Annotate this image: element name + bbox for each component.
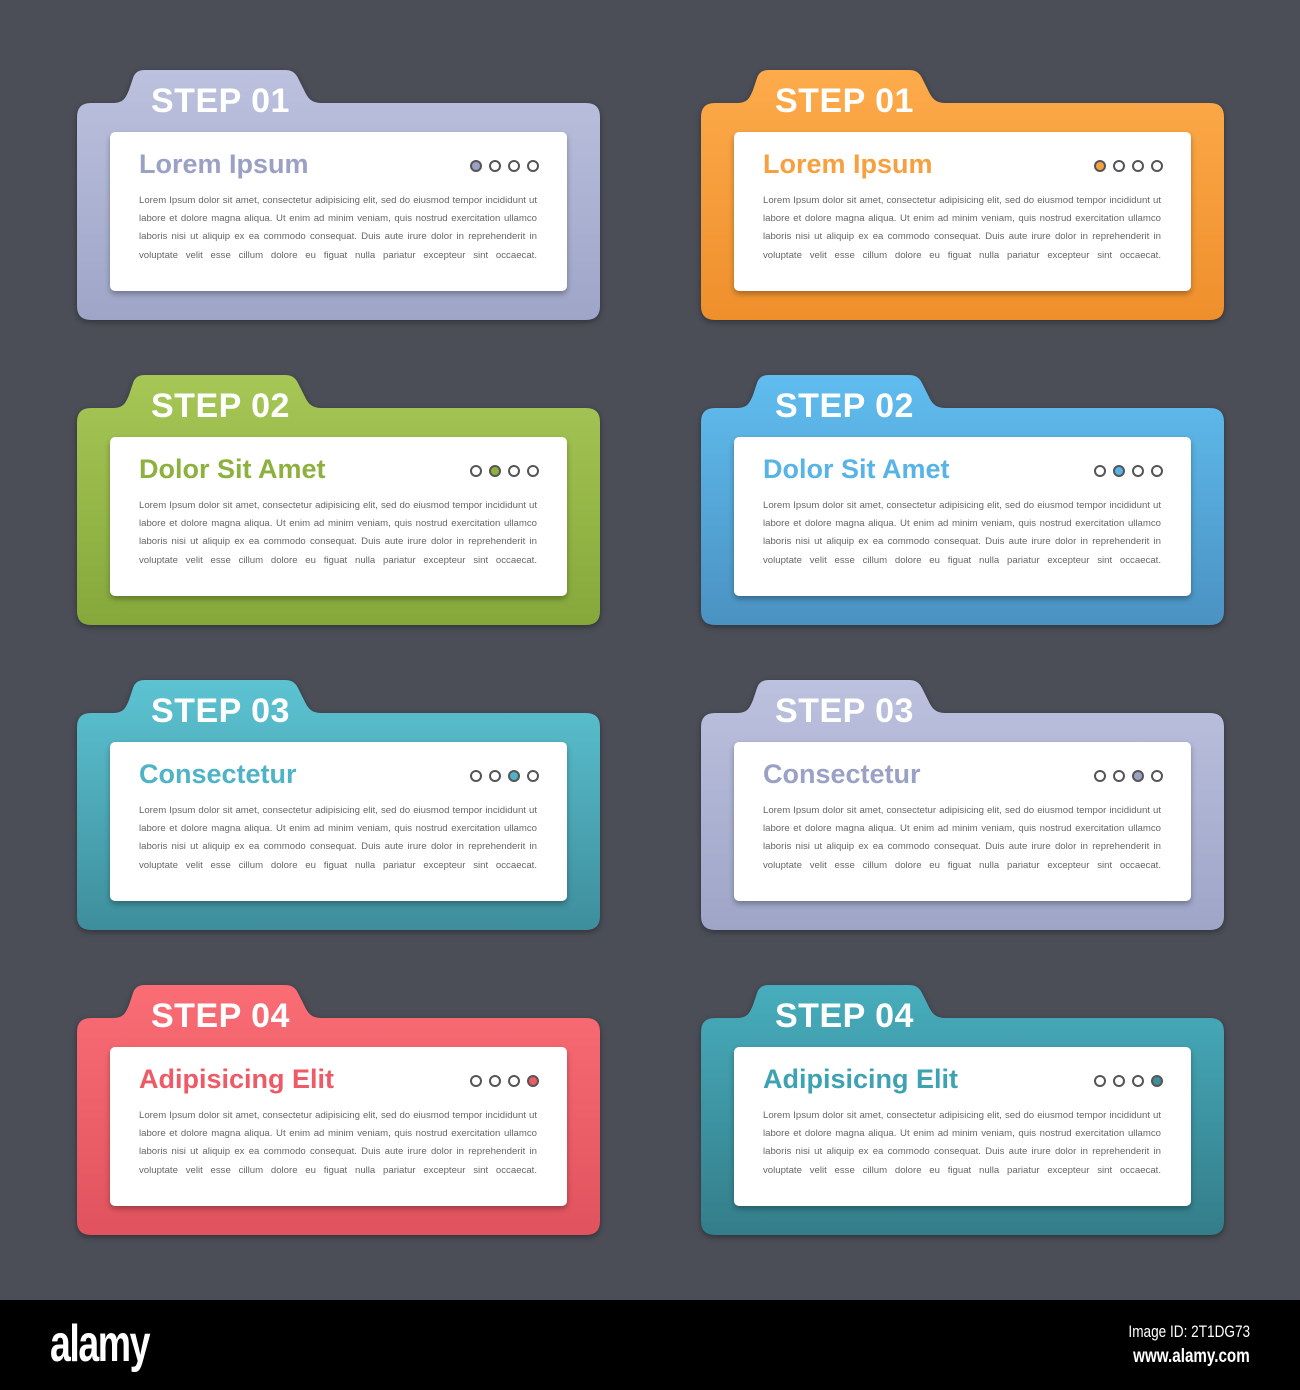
text block: Lorem Ipsum dolor sit amet, consectetur adipisicing elit, sed do eiusmod tempor incididunt ut	[139, 195, 537, 206]
text block: laboris nisi ut aliquip ex ea commodo consequat. Duis aute irure dolor in reprehenderit in	[139, 536, 537, 547]
title: Adipisicing Elit	[139, 1064, 334, 1094]
icon: progress dots	[470, 160, 539, 172]
text block	[139, 195, 537, 261]
logo: alamy	[50, 1315, 149, 1373]
title: Dolor Sit Amet	[139, 454, 326, 484]
icon: progress dots	[470, 465, 539, 477]
card: step 01 left	[75, 70, 602, 324]
title: Adipisicing Elit	[763, 1064, 958, 1094]
text block: voluptate velit esse cillum dolore eu figuat nulla pariatur excepteur sint occaecat.	[763, 555, 1161, 566]
text block: Lorem Ipsum dolor sit amet, consectetur adipisicing elit, sed do eiusmod tempor incididunt ut	[763, 195, 1161, 206]
text block: voluptate velit esse cillum dolore eu figuat nulla pariatur excepteur sint occaecat.	[139, 1165, 537, 1176]
title: Lorem Ipsum	[139, 149, 309, 179]
text block: voluptate velit esse cillum dolore eu figuat nulla pariatur excepteur sint occaecat.	[139, 555, 537, 566]
text block	[139, 805, 537, 871]
text block: voluptate velit esse cillum dolore eu figuat nulla pariatur excepteur sint occaecat.	[763, 1165, 1161, 1176]
text block: voluptate velit esse cillum dolore eu figuat nulla pariatur excepteur sint occaecat.	[763, 860, 1161, 871]
text block: Lorem Ipsum dolor sit amet, consectetur adipisicing elit, sed do eiusmod tempor incididunt ut	[139, 805, 537, 816]
text block: laboris nisi ut aliquip ex ea commodo consequat. Duis aute irure dolor in reprehenderit in	[139, 231, 537, 242]
text block: labore et dolore magna aliqua. Ut enim ad minim veniam, quis nostrud exercitation ullamco	[763, 518, 1161, 529]
panel: text box	[110, 132, 567, 291]
text block: voluptate velit esse cillum dolore eu figuat nulla pariatur excepteur sint occaecat.	[763, 250, 1161, 261]
text block: Lorem Ipsum dolor sit amet, consectetur adipisicing elit, sed do eiusmod tempor incididunt ut	[139, 500, 537, 511]
text block: laboris nisi ut aliquip ex ea commodo consequat. Duis aute irure dolor in reprehenderit in	[763, 536, 1161, 547]
heading: step 02: STEP 02	[775, 387, 914, 425]
title: Dolor Sit Amet	[763, 454, 950, 484]
title: Lorem Ipsum	[763, 149, 933, 179]
text block: Lorem Ipsum dolor sit amet, consectetur adipisicing elit, sed do eiusmod tempor incididunt ut	[763, 805, 1161, 816]
website: www.alamy.com	[1133, 1346, 1250, 1367]
image id: Image ID: 2T1DG73	[1128, 1322, 1250, 1341]
icon: progress dots	[1094, 160, 1163, 172]
heading: step 01: STEP 01	[775, 82, 914, 120]
text block	[763, 500, 1161, 566]
text block: Lorem Ipsum dolor sit amet, consectetur adipisicing elit, sed do eiusmod tempor incididunt ut	[763, 500, 1161, 511]
text block: labore et dolore magna aliqua. Ut enim ad minim veniam, quis nostrud exercitation ullamco	[763, 1128, 1161, 1139]
heading: step 01: STEP 01	[151, 82, 290, 120]
text block	[139, 1110, 537, 1176]
panel: text box	[734, 132, 1191, 291]
heading: step 03: STEP 03	[151, 692, 290, 730]
text block	[763, 195, 1161, 261]
card: step 01 right	[699, 70, 1226, 324]
text block: laboris nisi ut aliquip ex ea commodo consequat. Duis aute irure dolor in reprehenderit in	[139, 841, 537, 852]
panel: text box	[110, 437, 567, 596]
text block: labore et dolore magna aliqua. Ut enim ad minim veniam, quis nostrud exercitation ullamco	[139, 823, 537, 834]
text block: laboris nisi ut aliquip ex ea commodo consequat. Duis aute irure dolor in reprehenderit in	[763, 231, 1161, 242]
panel: text box	[734, 1047, 1191, 1206]
text block: laboris nisi ut aliquip ex ea commodo consequat. Duis aute irure dolor in reprehenderit in	[139, 1146, 537, 1157]
heading: step 03: STEP 03	[775, 692, 914, 730]
card: step 04 right	[699, 985, 1226, 1239]
heading: step 04: STEP 04	[775, 997, 914, 1035]
text block: labore et dolore magna aliqua. Ut enim ad minim veniam, quis nostrud exercitation ullamco	[139, 213, 537, 224]
panel: text box	[110, 1047, 567, 1206]
text block	[763, 805, 1161, 871]
icon: progress dots	[470, 770, 539, 782]
text block	[763, 1110, 1161, 1176]
panel: text box	[734, 742, 1191, 901]
text block	[139, 500, 537, 566]
card: step 03 right	[699, 680, 1226, 934]
panel: text box	[734, 437, 1191, 596]
icon: progress dots	[1094, 465, 1163, 477]
icon: progress dots	[470, 1075, 539, 1087]
text block: laboris nisi ut aliquip ex ea commodo consequat. Duis aute irure dolor in reprehenderit in	[763, 1146, 1161, 1157]
text block: laboris nisi ut aliquip ex ea commodo consequat. Duis aute irure dolor in reprehenderit in	[763, 841, 1161, 852]
text block: voluptate velit esse cillum dolore eu figuat nulla pariatur excepteur sint occaecat.	[139, 860, 537, 871]
panel: text box	[110, 742, 567, 901]
text block: labore et dolore magna aliqua. Ut enim ad minim veniam, quis nostrud exercitation ullamco	[763, 823, 1161, 834]
footer bar	[0, 1300, 1300, 1390]
title: Consectetur	[139, 759, 297, 789]
title: Consectetur	[763, 759, 921, 789]
icon: progress dots	[1094, 1075, 1163, 1087]
card: step 04 left	[75, 985, 602, 1239]
card: step 02 right	[699, 375, 1226, 629]
text block: voluptate velit esse cillum dolore eu figuat nulla pariatur excepteur sint occaecat.	[139, 250, 537, 261]
text block: Lorem Ipsum dolor sit amet, consectetur adipisicing elit, sed do eiusmod tempor incididunt ut	[139, 1110, 537, 1121]
icon: progress dots	[1094, 770, 1163, 782]
text block: Lorem Ipsum dolor sit amet, consectetur adipisicing elit, sed do eiusmod tempor incididunt ut	[763, 1110, 1161, 1121]
text block: labore et dolore magna aliqua. Ut enim ad minim veniam, quis nostrud exercitation ullamco	[139, 1128, 537, 1139]
heading: step 02: STEP 02	[151, 387, 290, 425]
heading: step 04: STEP 04	[151, 997, 290, 1035]
card: step 02 left	[75, 375, 602, 629]
text block: labore et dolore magna aliqua. Ut enim ad minim veniam, quis nostrud exercitation ullamco	[763, 213, 1161, 224]
card: step 03 left	[75, 680, 602, 934]
text block: labore et dolore magna aliqua. Ut enim ad minim veniam, quis nostrud exercitation ullamco	[139, 518, 537, 529]
